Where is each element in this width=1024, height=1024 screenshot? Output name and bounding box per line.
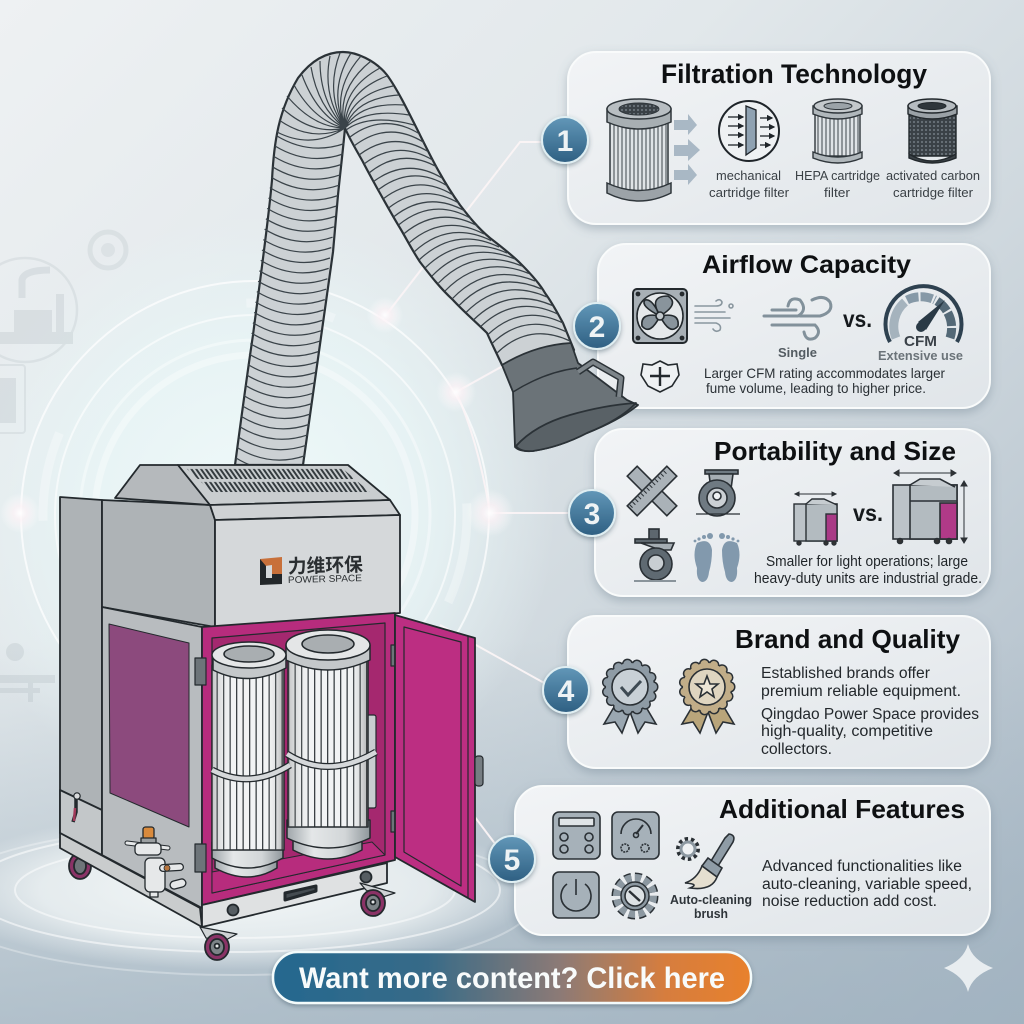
icon: speed dial — [612, 812, 659, 859]
description: premium reliable equipment. — [761, 683, 961, 700]
faded factory icons — [0, 232, 126, 702]
icon: activated carbon filter — [908, 99, 957, 163]
brush caption: Auto-cleaning — [670, 893, 752, 907]
panel 2: airflow capacity — [598, 244, 990, 408]
gauge labels: Extensive use — [878, 348, 963, 363]
hose ribs: lower column — [236, 136, 344, 470]
hose ribs: descending run — [350, 124, 570, 353]
filter labels: cartridge filter — [893, 185, 974, 200]
filter labels — [709, 168, 980, 200]
badge 5 — [489, 836, 535, 882]
description: Qingdao Power Space provides — [761, 706, 979, 723]
brush caption — [670, 893, 752, 921]
open cabinet interior — [202, 613, 395, 905]
description — [754, 554, 982, 587]
left filter cartridge — [212, 642, 290, 877]
badge 4: 4 — [558, 675, 575, 708]
icon: caster bottom — [634, 529, 676, 581]
description: heavy-duty units are industrial grade. — [754, 571, 982, 587]
panel 3: portability and size — [595, 429, 990, 596]
badge 2 — [574, 303, 620, 349]
description: collectors. — [761, 741, 832, 758]
icon: small wind — [695, 300, 733, 331]
call to action button: Want more content? Click here — [299, 962, 725, 995]
icon: shield — [641, 361, 679, 392]
vs label: vs. — [843, 306, 872, 332]
heading: Brand and Quality — [735, 624, 961, 654]
icon: small machine — [794, 492, 837, 545]
icon: large cartridge filter — [607, 99, 671, 201]
icon: footprints — [694, 533, 740, 582]
badge 3: 3 — [584, 498, 600, 531]
brand logo: 力维环保 — [288, 554, 363, 578]
base front — [202, 863, 387, 927]
icon: crossed rulers — [627, 466, 677, 516]
badge 5: 5 — [504, 844, 520, 877]
icon: caster top — [696, 470, 740, 516]
left side column — [60, 497, 202, 927]
description: Established brands offer — [761, 665, 930, 682]
right filter cartridge — [286, 630, 376, 859]
icon: HEPA filter — [813, 99, 862, 163]
description: auto-cleaning, variable speed, — [762, 876, 972, 893]
flexible hose — [235, 52, 574, 470]
cabinet hinges — [195, 645, 399, 872]
icon: cleaning brush — [685, 834, 734, 889]
extraction hood — [502, 343, 638, 451]
description: noise reduction add cost. — [762, 893, 937, 910]
panel 4: brand and quality — [568, 616, 990, 768]
filter labels: filter — [824, 185, 851, 200]
call to action button — [273, 952, 751, 1003]
description — [704, 365, 945, 396]
filter labels: cartridge filter — [709, 185, 790, 200]
heading: Airflow Capacity — [702, 251, 911, 279]
lower side panel — [102, 607, 202, 908]
hood handle — [578, 362, 621, 397]
icon: mechanical filter circle — [719, 101, 779, 161]
gauge labels: Single — [778, 345, 817, 360]
description: Larger CFM rating accommodates larger — [704, 365, 945, 381]
filter labels: HEPA cartridge — [795, 168, 880, 183]
description: Smaller for light operations; large — [766, 554, 968, 570]
icon: gear wrench — [617, 878, 653, 914]
inner handle — [367, 715, 376, 808]
badge 1 — [542, 117, 588, 163]
hose ribs: arch fan — [277, 53, 414, 140]
vs label: vs. — [853, 500, 883, 526]
icon: small gear — [679, 840, 697, 858]
icon: power button — [553, 872, 599, 918]
drain valve — [73, 793, 80, 822]
air regulator — [127, 827, 187, 897]
icon: control panel — [553, 812, 600, 859]
icon: large machine — [893, 470, 967, 544]
gauge labels: CFM — [904, 333, 937, 350]
panel 1: filtration technology — [568, 52, 990, 224]
icon: gold rosette — [682, 663, 734, 733]
heading: Additional Features — [719, 794, 965, 824]
description: high-quality, competitive — [761, 723, 933, 740]
brand logo: POWER SPACE — [288, 573, 362, 586]
upper housing — [102, 465, 400, 627]
description: fume volume, leading to higher price. — [706, 380, 926, 396]
open door — [395, 615, 483, 902]
badge 1: 1 — [557, 125, 573, 158]
brand logo — [260, 554, 363, 586]
badge 3 — [569, 490, 615, 536]
filter labels: mechanical — [716, 168, 781, 183]
icon: airflow arrows — [674, 114, 700, 185]
icon: CFM gauge — [885, 286, 961, 342]
description — [761, 665, 979, 758]
badge 2: 2 — [589, 311, 605, 344]
icon: large wind — [764, 297, 831, 339]
filter labels: activated carbon — [886, 168, 980, 183]
heading: Filtration Technology — [661, 59, 927, 89]
gauge labels — [778, 333, 963, 363]
rear casters — [69, 853, 91, 879]
description: Advanced functionalities like — [762, 858, 962, 875]
brush caption: brush — [694, 907, 728, 921]
dust collector machine — [60, 465, 483, 960]
connector lines — [0, 142, 570, 845]
heading: Portability and Size — [714, 436, 956, 466]
front casters — [200, 883, 395, 960]
panel 5: additional features — [515, 786, 990, 935]
description — [762, 858, 972, 910]
icon: silver rosette — [604, 663, 656, 733]
icon: sparkle star — [944, 944, 993, 992]
icon: fan — [633, 289, 687, 343]
badge 4 — [543, 667, 589, 713]
